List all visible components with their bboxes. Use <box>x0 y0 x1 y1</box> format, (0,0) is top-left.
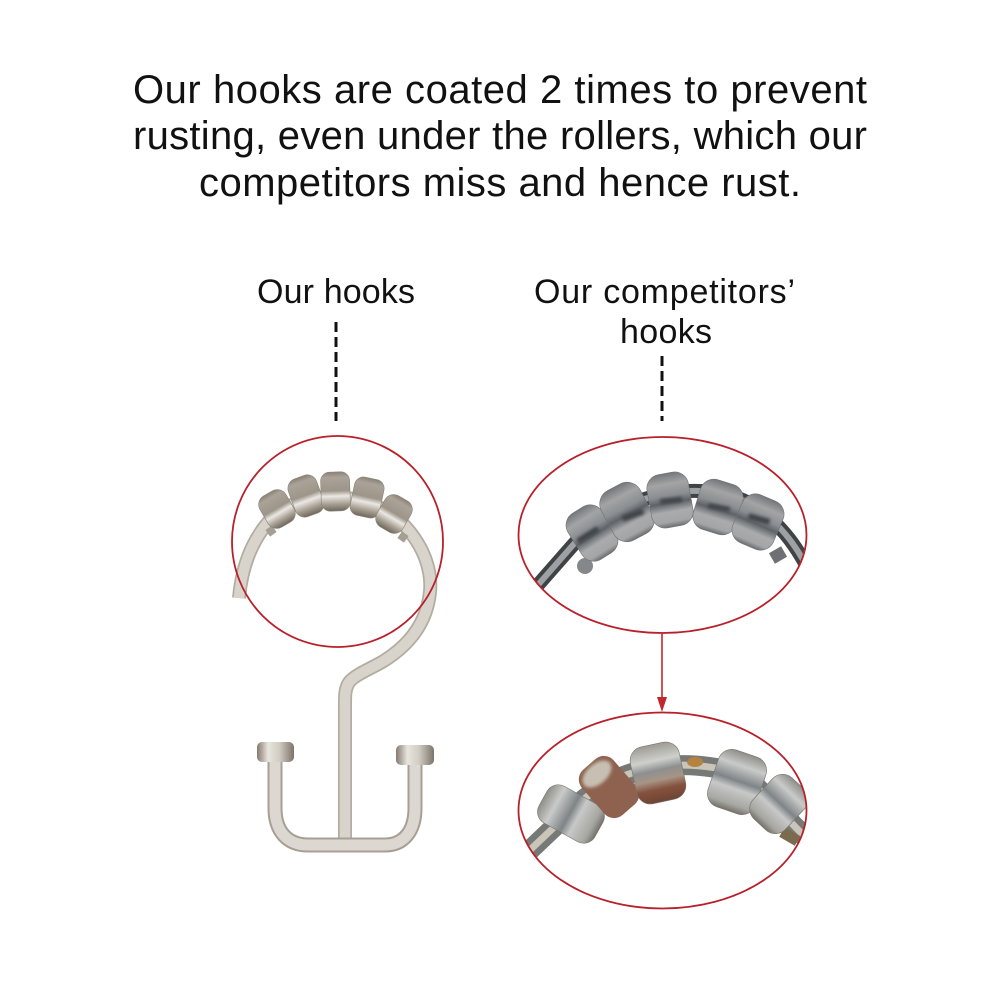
label: competitors' hooks: Our competitors’ <box>534 273 795 311</box>
tabs <box>577 558 593 574</box>
zoom detail: competitor hook rollers <box>537 470 806 586</box>
red ellipse: competitor hook <box>518 437 806 633</box>
left end cap <box>257 742 294 762</box>
red ellipse: rusted hook <box>518 712 806 908</box>
title: competitors miss and hence rust. <box>199 161 801 205</box>
rust spot on rail <box>687 757 703 767</box>
rail <box>537 491 806 586</box>
title <box>133 68 867 205</box>
label: competitors' hooks: hooks <box>620 313 712 351</box>
label: our hooks: Our hooks <box>257 273 415 311</box>
red circle: our hook rollers <box>232 436 443 647</box>
rail <box>530 765 806 850</box>
right end cap <box>396 745 434 765</box>
title: Our hooks are coated 2 times to prevent <box>133 68 867 112</box>
dashed leader: our hooks <box>334 322 338 421</box>
dashed leader: competitors' hooks <box>660 356 664 421</box>
label: competitors' hooks <box>534 273 795 351</box>
rollers <box>255 471 416 537</box>
tab <box>779 827 800 846</box>
zoom detail: rusted competitor rollers <box>530 739 814 850</box>
rollers <box>537 784 605 844</box>
title: rusting, even under the rollers, which our <box>133 114 867 158</box>
small tabs <box>265 525 409 543</box>
product: our shower hook <box>239 471 434 845</box>
dark reflections <box>576 497 770 544</box>
hook body <box>239 497 430 845</box>
rollers <box>566 472 784 562</box>
arrow <box>657 633 667 712</box>
